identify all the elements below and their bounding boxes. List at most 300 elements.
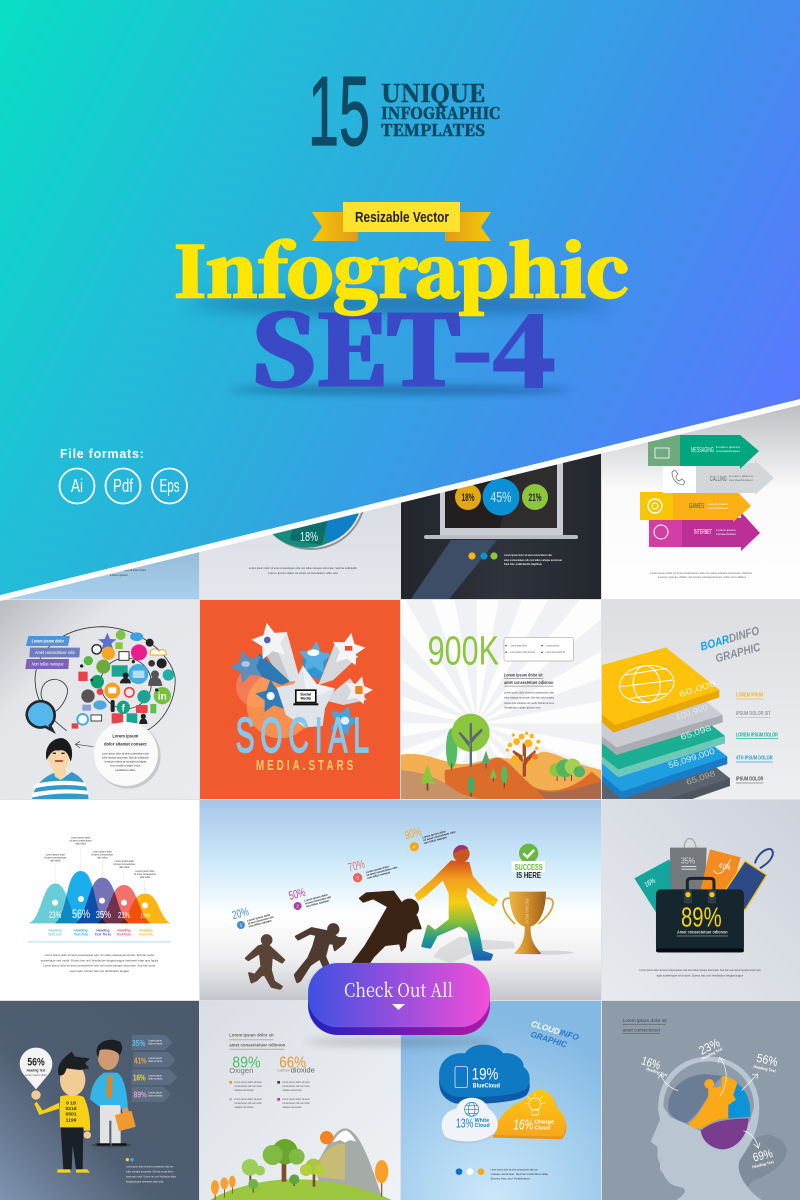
heading: 15 unique infographic templates: TEMPLATES [381,118,485,141]
head shadow [737,1135,787,1187]
label: 16 percent: Heading Text [646,1066,669,1078]
heading labels: Text One [48,933,62,937]
arrow: messaging: consectetuer [716,449,740,453]
character: man in yellow shirt: 0218 [65,1106,77,1112]
caption text: Lorem ipsum [110,573,128,577]
social icon cloud: f [122,703,126,714]
callout circle: Lorem ipsum [112,734,139,740]
white cloud: Cloud [475,1123,490,1129]
heading labels [48,929,153,937]
arrows [658,1057,760,1148]
legend: Donec hac orci Vestibulum [491,1178,530,1181]
legend box: Lorem ipsum Dolor Sit Amet [510,651,535,654]
stat: carbon dioxide: dioxide [291,1067,315,1074]
text block [41,953,159,973]
percent: 90: Lorem ipsum dolor [422,829,446,839]
heading labels: Heading [74,929,88,933]
mountain [315,1128,382,1197]
brain: grey lobe [668,1074,723,1123]
percent: 70: 3 [356,875,359,880]
panel: cloud infographic tile [401,1001,601,1200]
orange cloud: Orange [534,1119,554,1125]
balloon: 56 percent [20,1048,52,1089]
bell curve chart [28,871,171,923]
heading: 15 unique infographic templates: UNIQUE [381,74,485,109]
heading text: amet consectetuer [623,1027,661,1032]
success text: IS HERE [516,871,542,880]
label: 56 percent: Heading Text [753,1064,777,1073]
thought bubble outline [35,627,175,731]
label: 23 percent: Heading Text [701,1046,724,1061]
runner 1 silhouette [246,935,284,989]
top notes: sit amet consectetuer [134,873,156,876]
layer values [667,678,718,787]
text block with dots: vitae eget morbi. Donec hac orci Vestibulum diam [126,1174,177,1178]
percent: 90: 90% [403,824,423,842]
heading: set-4: SET-4 [252,277,556,413]
balloon: 56 percent: 56% [27,1057,45,1069]
caption text: Lorem ipsum dolor sit amet consectetuer odio non tellus natoque accumsan. Sed hac sem ipsum tempus turpis quis [639,968,761,972]
heading: board info graphic [699,624,762,665]
character: man in yellow shirt: 0501 [65,1112,77,1118]
arrow: games [640,492,751,522]
top notes: Lorem ipsum dolor [46,853,65,856]
caption text [650,572,752,578]
brain cavity [663,1061,754,1132]
runner 2 silhouette [295,924,346,982]
percent: 70: 70% [346,857,366,875]
layer labels: LOREM IPSUM [736,693,763,699]
navy price tag [723,849,773,910]
glow circles [236,674,304,738]
heading: media stars: MEDIA.STARS [256,757,353,773]
sunburst background [401,600,601,770]
percent: 50: non tellus natoque [305,898,330,908]
top notes: odio tellus [140,876,151,879]
caption text: Lorem ipsum dolor sit amet consectetuer odio non tellus natoque accumsan. Sed hac [650,571,753,575]
caption text [249,567,357,574]
labels: percent arrows: 41% [134,1055,147,1065]
orange cloud [493,1090,566,1139]
panel: briefcase tile [602,800,800,1000]
grey bag: 35% [681,857,695,866]
labels: percent arrows: 16% [133,1072,146,1082]
panel: runners success tile [200,800,601,1000]
dotted leader lines [55,849,144,893]
text block: Lorem Ipsum dolor sit [504,672,543,677]
briefcase [656,878,744,952]
text block with dots: tellus natoque accumsan. Sed hac sociis libero [126,1169,174,1173]
labels: percent arrows: dolor sit amet [148,1043,163,1046]
text block with dots [126,1158,177,1183]
curve values: 23% [49,910,61,920]
arrow: calling: consectetuer [729,478,753,482]
brain: purple lobe [701,1118,748,1149]
briefcase: 89% [681,902,722,933]
file formats: Pdf [113,476,134,496]
layer labels: LOREM IPSUM DOLOR [736,732,778,738]
heading text: amet consectetuer odionon [229,1042,285,1047]
head silhouette [651,1057,762,1200]
panel: social media stars tile [200,600,400,799]
text block: tellus natoque accumsan. Sed hac dolor tempus [504,696,555,700]
percent: 50: 2 [296,904,299,909]
label: lorem ipsum dolor [26,636,70,646]
heading text [229,1033,285,1050]
label: non tellus natoque [25,659,69,669]
layer values: 65,098 [685,768,717,787]
text block: Vestibulum diam ipsum non [504,706,541,710]
legend box: Lorem ipsum Dolor [510,644,527,647]
legend: natoque accumsan. Sed hac sociis libero vitae [491,1173,549,1176]
bullet list: Lorem ipsum dolor sit amet [282,1081,310,1084]
heading labels: Text Four [117,933,132,937]
bullet list [229,1081,310,1109]
runner 4 polygon figure [416,845,497,959]
callout circle: vestibulum diam [115,768,136,772]
button: check out all: Check Out All [344,976,453,1003]
trees [421,714,585,797]
chart bubbles: 18% [462,492,475,504]
top notes [44,837,156,879]
label: amet consectetuer odio: Amet consectetuer odio [34,650,75,656]
text block: amet consectetuer odionon [504,680,554,685]
curve values [49,896,151,921]
percent: 90: sit amet consectetuer odio [423,830,456,842]
text block: Lorem ipsum dolor sit amet consectetuer odio [504,690,554,694]
light beam [411,540,497,599]
button: check out all [305,963,495,1047]
caption text: Lorem ipsum dolor sit amet consectetuer odio non tellus natoque accumsan. Sed hac sollicitudin [249,566,358,570]
labels: percent arrows: 35% [132,1038,146,1048]
layer labels [736,693,778,783]
trophy [503,892,573,955]
callout circle: tellus natoque accumsan. Sed hac sollicitudin [102,755,149,759]
top notes: Lorem ipsum dolor [135,870,155,873]
white cloud [442,1098,498,1143]
bullet list: Lorem ipsum dolor sit amet [234,1098,262,1101]
caption text [639,968,761,977]
legend [456,1168,549,1181]
orange cloud: Cloud [534,1125,551,1131]
labels: percent arrows: Lorem ipsum [148,1074,162,1077]
heading: cloud info graphic: GRAPHIC [529,1029,569,1050]
bullet list: natoque accumsan [234,1089,254,1092]
legend box: Lorem ipsum Dolor Sit [546,651,565,654]
bullet list: consectetuer odio non tellus [282,1085,310,1088]
labels: percent arrows: dolor sit amet [148,1094,163,1097]
stat: oxygen: Oxigen [229,1068,253,1075]
label: 16 percent: 16% [640,1053,663,1073]
percent: 90: non tellus natoque [423,835,448,845]
labels: percent arrows: Lorem ipsum [148,1040,162,1043]
file formats: Eps [160,476,180,496]
person with striped shirt [32,738,89,800]
orange bag: 41% [718,861,732,872]
layer values: 100,900 [674,702,709,722]
success text: SUCCESS [515,863,543,872]
percent: 50 [287,885,332,910]
layer labels: 4TH IPSUM DOLOR [736,756,773,762]
heading labels: Heading [117,929,131,933]
icon: social media laptop: Social [300,692,311,696]
brain: orange puzzle piece [688,1076,737,1129]
arrow: games: consectetuer [708,506,728,510]
text block: scelerisque sed morbi. Donec hac orci Vestibulum feugiat augue hendrerit vitae quis ligula [41,958,159,962]
top notes: odio tellus [119,866,130,869]
bullet list: natoque accumsan [234,1106,254,1109]
top notes: Lorem ipsum dolor [93,850,112,853]
success text [512,861,545,880]
heading: board info graphic: BOARDINFO [699,624,761,654]
caption text [110,569,146,576]
arrow: internet: INTERNET [694,529,712,536]
callout circle: tempus metus at suscipit volutpat [104,760,146,764]
chart bubbles: 45% [490,489,512,506]
percent: 70: sit amet consectetuer odio [366,865,398,877]
trophy: REWARDS [524,898,529,924]
labels: percent arrows: 89% [134,1089,147,1099]
icon: sun [320,1131,333,1144]
percent: 20 [230,904,275,929]
heading: board info graphic: GRAPHIC [714,641,762,665]
panel: arrow options tile [602,400,800,599]
balloon: 56 percent: Lorem ipsum dolor [25,1073,47,1077]
label: lorem ipsum dolor: Lorem ipsum dolor [32,639,65,645]
label: 69 percent [751,1146,775,1169]
arrow: games: GAMES [689,503,704,510]
stacked isometric layers [600,648,730,822]
runner shadow [433,937,515,963]
layer labels: IPSUM DOLOR SIT [736,711,771,717]
stat: carbon dioxide: 66% [279,1055,306,1072]
percent: 70 [346,857,399,882]
panel: 900K landscape tile [401,600,601,799]
icon: success check [519,844,538,863]
text block: Lorem ipsum dolor sit amet consectetuer odio non tellus natoque accumsan. Sed hac sociis [43,964,156,968]
layer values: 60,008 [677,678,718,699]
layer values: 56,099,000 [667,746,716,770]
curve values: 19% [140,911,151,920]
pie chart [268,506,365,550]
panel: hero banner [0,0,800,601]
hill [210,1179,392,1200]
briefcase: Amet consectetuer odionon [677,929,728,934]
top notes: sit amet consectetuer [91,853,114,856]
icon: globe [617,662,676,706]
blue cloud: BlueCloud [473,1083,500,1089]
labels: percent arrows [132,1035,177,1102]
percent: 50: Lorem ipsum dolor [304,893,328,903]
caption text: Lorem ipsum dolor sit amet consec [110,568,147,572]
heading: 15 unique infographic templates: 15 [308,56,370,166]
arrow: internet: Lorem ipsum [716,528,737,532]
label: 69 percent: 69% [751,1146,774,1165]
caption text: Lorem ipsum dolor sit amet consectetuer odio non [268,571,339,575]
arrow: calling [663,460,774,495]
chart bubbles [455,478,548,516]
caption text: eget scelerisque sed morbi. Donec hac orci Vestibulum feugiat augue [657,973,744,977]
file formats [60,447,187,504]
heading: social: SOCIAL [236,709,369,763]
file formats: File formats: [60,447,145,461]
heading: cloud info graphic: CLOUDINFO [530,1018,581,1042]
icon: speech bubble [27,701,55,731]
percent: 70: non tellus natoque [367,870,391,880]
label: 56 percent: 56% [755,1051,779,1069]
label: non tellus natoque: Non tellus natoque [32,661,64,667]
text block: metus quis volutpat est morbi. Donec at eros [504,701,555,705]
label: 23 percent: 23% [697,1035,722,1058]
percent: 90 [403,824,457,851]
panel: pie chart tile [249,506,365,574]
bullet list: consectetuer odio non tellus [282,1102,310,1105]
arrow: calling: Lorem ipsum [729,474,754,478]
bullet list: consectetuer odio non tellus [234,1102,262,1105]
legend: Sed hac sollicitudin dapibus [504,562,543,566]
top notes: odio tellus [97,856,108,859]
character: man in yellow shirt: 0 18 [66,1100,76,1106]
percent: 20: 20% [230,904,250,922]
pie chart: 18% [300,529,318,544]
orange cloud: 16% [513,1117,533,1133]
bullet list: Lorem ipsum dolor sit amet [282,1098,310,1101]
character: man in yellow shirt: 1199 [66,1117,77,1123]
heading labels: Heading [48,929,62,933]
labels: percent arrows: dolor sit amet [148,1077,163,1080]
percent: 20: 1 [240,923,243,928]
percent: 90: 4 [413,844,416,849]
heading: 15 unique infographic templates [308,56,500,166]
text block: sed morbi. Donec hac orci Vestibulum feugiat [70,969,129,973]
heading labels: Heading [96,929,110,933]
ribbon: resizable vector: Resizable Vector [355,209,449,226]
balloon: 56 percent: Heading Text [27,1068,46,1073]
label: 69 percent: Heading Text [752,1159,775,1169]
ribbon: resizable vector [312,202,491,241]
heading labels: Text Three [95,933,111,937]
panel: brain head tile [602,1001,800,1200]
shadows under title [190,297,610,394]
percent: 70: Lorem ipsum dolor [365,864,389,874]
top notes: sit amet consectetuer [70,839,92,842]
bullet list: Lorem ipsum dolor sit amet [234,1081,262,1084]
legend: Lorem ipsum dolor sit amet consectetuer odio non [491,1168,539,1171]
character: man in blue shirt [90,1040,136,1147]
text block with dots: Lorem ipsum dolor sit amet consectetuer odio non [126,1164,174,1168]
percent: 50: sit amet consectetuer odio [305,895,332,906]
heading: 15 unique infographic templates: INFOGRAPHIC [381,101,500,124]
text block: Lorem ipsum dolor sit amet consectetuer odio non tellus natoque accumsan. Sed hac sociis [45,953,155,957]
curve values: 56% [72,908,90,921]
panel: bell curves tile [0,800,199,1000]
star rays and stars [226,619,376,738]
top notes: sit amet consectetuer [44,856,67,859]
arrow: internet: consectetuer [716,532,736,536]
heading labels: Heading [139,929,153,933]
top notes: Lorem ipsum dolor [115,860,134,863]
panel: board infographic tile [602,626,800,799]
stat: oxygen: 89% [232,1055,261,1072]
hills [400,752,602,800]
heading text [623,1018,667,1034]
bullet list: consectetuer odio non tellus [234,1085,262,1088]
blue cloud: 19% [472,1064,498,1083]
social icon cloud: in [158,691,167,702]
runner 3 silhouette [350,892,421,967]
arrow: calling: CALLING [710,476,727,483]
heading labels: Text Five [139,933,153,937]
white cloud: 13% [456,1116,473,1130]
top notes: Lorem ipsum dolor [71,837,91,840]
labels: percent arrows: Lorem ipsum [148,1057,162,1060]
stat: carbon dioxide: Carbon [277,1068,290,1072]
text block with dots: feugiat augue hendrerit vitae quis [126,1179,164,1183]
heading text: Lorem ipsum dolor sit [623,1018,667,1023]
white cloud: White [475,1118,489,1124]
curve values: 35% [96,910,111,921]
callout circle: Lorem ipsum dolor sit amet consectetuer odio [102,751,149,755]
percent: 20: sit amet consectetuer odio [247,915,274,926]
arrow: internet [649,512,760,551]
heading text: Lorem ipsum dolor sit [229,1033,274,1038]
top notes: odio tellus [50,859,61,862]
bullet list: natoque accumsan [282,1089,302,1092]
layer values: 65,098 [679,722,713,742]
arrow: messaging: MESSAGING [691,447,714,454]
label: amet consectetuer odio [29,648,80,657]
callout circle: est morbi ornare eros [110,764,141,768]
bullet list: natoque accumsan [282,1106,302,1109]
panel: two characters tile [0,1001,199,1200]
top notes: sit amet consectetuer [113,863,136,866]
text block [504,672,555,710]
legend box [504,638,573,661]
curve values: 21% [118,910,130,920]
chart bubbles: 21% [528,492,542,504]
big number 900K: 900K [428,627,499,673]
heading: infographic: Infographic [174,218,629,317]
labels: percent arrows: dolor sit amet [148,1060,163,1063]
panel: laptop tile [401,448,601,599]
icon: social media laptop: Media [300,696,312,700]
trees [211,1139,388,1200]
social icon cloud [72,630,174,729]
caption text: Lorem ipsum dolor sit amet consectetuer odio non tellus [658,575,747,579]
legend: amet consectetuer odio non tellus natoque accumsan [504,558,562,562]
teal bag: 16% [643,876,657,889]
arrow: messaging [648,435,759,469]
percent: 20: non tellus natoque [248,918,272,928]
percent: 20: Lorem ipsum dolor [247,913,271,923]
panel: chart preview tile, blue corner [0,546,199,599]
labels: percent arrows: Lorem ipsum [148,1091,162,1094]
layer labels: IPSUM DOLOR [736,777,763,783]
legend: Lorem ipsum dolor sit amet consectetuer odio [504,553,552,557]
callout circle: dolor sitamet consect [104,742,147,748]
arrow: messaging: Lorem ipsum [716,445,741,449]
character: man in yellow shirt [31,1052,91,1173]
panel: oxygen landscape tile [200,1001,400,1200]
heading labels: Text Two [74,933,88,937]
legend box: Lorem ipsum Dolor [546,644,560,647]
laptop [424,457,578,539]
top notes: odio tellus [75,842,87,845]
arrow to person [75,741,93,748]
blue cloud [439,1045,530,1104]
arrow: games: Lorem ipsum [708,502,729,506]
callout circle [94,722,161,789]
